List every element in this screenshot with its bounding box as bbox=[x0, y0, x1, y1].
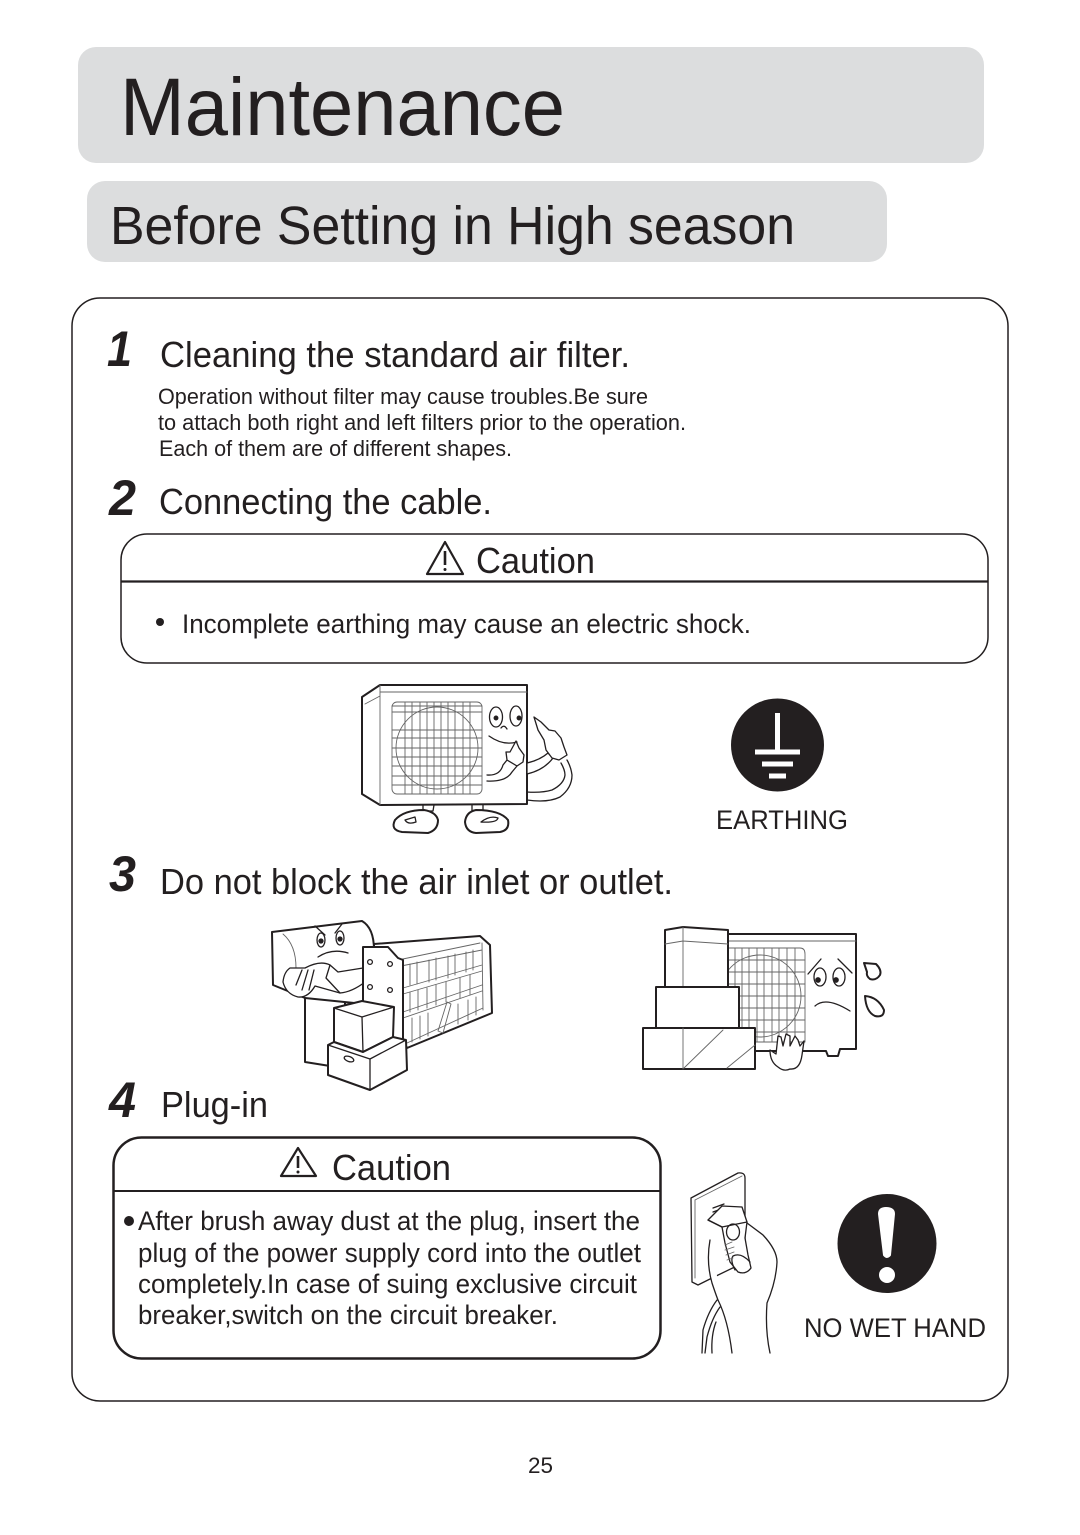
hand and cords bbox=[702, 1300, 720, 1353]
icon: warning triangle bbox=[427, 542, 463, 574]
caution bullet text: After brush away dust at the plug, insert the bbox=[138, 1206, 640, 1236]
step 4 heading bbox=[108, 1072, 268, 1128]
step 1 description bbox=[158, 384, 686, 461]
step 1 description: Operation without filter may cause troubles.Be sure bbox=[158, 384, 648, 409]
step 3 heading bbox=[109, 846, 673, 902]
illustration: unit blocked by stacked boxes bbox=[643, 927, 884, 1070]
illustration: hand inserting plug bbox=[691, 1173, 777, 1353]
step 2 heading: Connecting the cable. bbox=[159, 481, 492, 522]
label: earthing: EARTHING bbox=[716, 805, 848, 835]
subtitle banner: Before Setting in High season bbox=[110, 196, 795, 256]
step 2 heading: 2 bbox=[108, 470, 136, 526]
main panel bbox=[72, 298, 1008, 1401]
unit lower body bbox=[305, 996, 345, 1068]
step 1 heading: 1 bbox=[107, 321, 132, 377]
step 1 heading: Cleaning the standard air filter. bbox=[160, 334, 630, 375]
step 2 heading bbox=[108, 470, 492, 526]
caution box: earthing bbox=[121, 534, 988, 663]
step 3 heading: 3 bbox=[109, 846, 136, 902]
step 3 heading: Do not block the air inlet or outlet. bbox=[160, 861, 673, 902]
shelf side panel bbox=[363, 947, 403, 1040]
step 1 description: Each of them are of different shapes. bbox=[159, 436, 512, 461]
boxes bbox=[665, 927, 728, 988]
caution bullet text: plug of the power supply cord into the outlet bbox=[138, 1238, 641, 1268]
icon: warning triangle bbox=[281, 1148, 316, 1176]
pointing hand bbox=[487, 741, 524, 781]
illustration: outdoor unit with cable bbox=[362, 685, 572, 833]
caution box: plug-in bbox=[114, 1138, 660, 1358]
caution box: earthing: Caution bbox=[476, 540, 595, 581]
boxes bbox=[334, 1001, 394, 1052]
wall plate bbox=[691, 1173, 745, 1285]
worried face bbox=[814, 968, 826, 986]
page number: 25 bbox=[528, 1453, 553, 1478]
title banner bbox=[78, 47, 984, 163]
caution box: plug-in: Caution bbox=[332, 1147, 451, 1188]
caution bullet text bbox=[124, 1206, 641, 1330]
shoes bbox=[423, 805, 483, 811]
title banner: Maintenance bbox=[120, 62, 565, 153]
hand bbox=[770, 1034, 804, 1070]
label: no wet hand: NO WET HAND bbox=[804, 1313, 986, 1343]
caution bullet text: breaker,switch on the circuit breaker. bbox=[138, 1300, 558, 1330]
step 4 heading: 4 bbox=[108, 1072, 136, 1128]
step 4 heading: Plug-in bbox=[161, 1084, 268, 1125]
plug bbox=[708, 1206, 751, 1273]
caution bullet text: Incomplete earthing may cause an electric shock. bbox=[182, 609, 751, 639]
cable arm and plug bbox=[527, 753, 553, 774]
subtitle banner bbox=[87, 181, 887, 262]
sweat drops bbox=[864, 963, 880, 980]
illustration: unit blocked by shelf and boxes bbox=[272, 921, 492, 1090]
caution bullet text: completely.In case of suing exclusive circuit bbox=[138, 1269, 637, 1299]
icon: earthing symbol bbox=[731, 698, 824, 792]
shelf back bbox=[374, 936, 492, 1048]
crossed arms bbox=[283, 963, 365, 997]
step 1 description: to attach both right and left filters prior to the operation. bbox=[158, 410, 686, 435]
step 1 heading bbox=[107, 321, 630, 377]
face bbox=[490, 707, 502, 727]
icon: no wet hand exclamation bbox=[838, 1194, 936, 1293]
angry face bbox=[317, 933, 325, 947]
unit upper body bbox=[272, 921, 374, 1005]
